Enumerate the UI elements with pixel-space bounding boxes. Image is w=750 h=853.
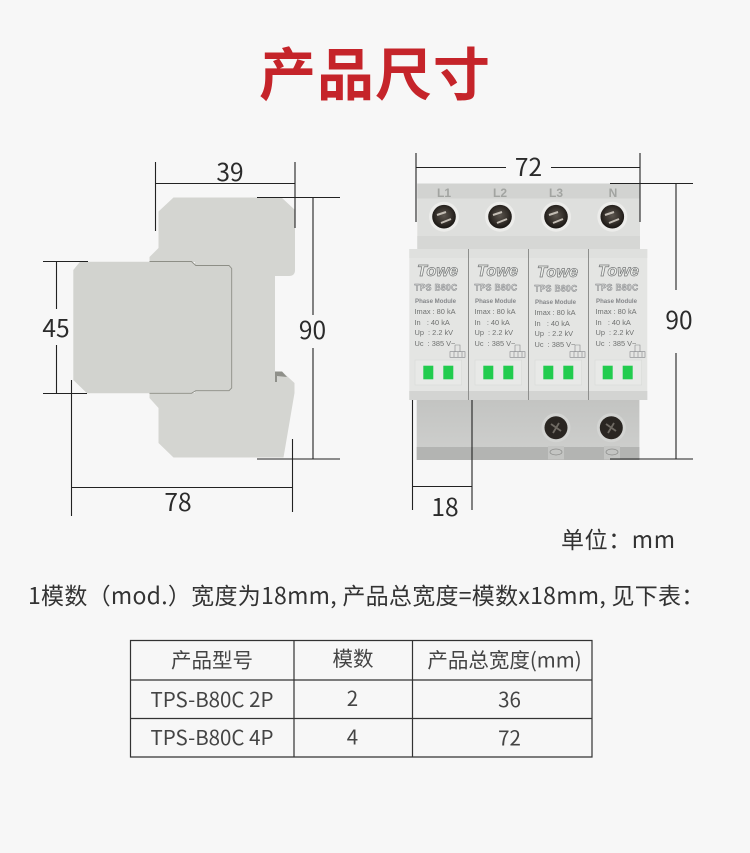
table row: 4P: TPS-B80C 4P [151, 721, 273, 751]
side view: rear body [150, 198, 295, 458]
module 3: Up : 2.2 kV [534, 329, 573, 338]
module 1: Up : 2.2 kV [414, 328, 453, 337]
side view: front cover [73, 262, 232, 393]
module 4: Up : 2.2 kV [596, 328, 634, 337]
module 3: In : 40 kA [534, 319, 570, 328]
module 2: Towe [477, 263, 518, 280]
dimension: 90 side: 90 [299, 312, 326, 347]
dimension: 78 [72, 380, 292, 519]
device: bottom base [417, 400, 639, 460]
size table [130, 640, 592, 757]
module 3: Towe [537, 264, 578, 281]
dimension: 90 front [610, 184, 693, 459]
device: top terminal block: L3 [549, 186, 563, 200]
table header: 产品型号 [171, 644, 253, 674]
table row: 2P: TPS-B80C 2P [151, 683, 273, 713]
module 3: Phase Module [535, 299, 576, 306]
table row: 2P: 2 [347, 682, 358, 712]
module 2 [474, 263, 525, 385]
module 2: In : 40 kA [474, 318, 510, 327]
table header: 模数 [332, 642, 374, 672]
dimension: 90 side [257, 198, 340, 459]
module 1: Towe [417, 263, 458, 280]
module 1: In : 40 kA [414, 318, 450, 327]
table header [171, 642, 582, 674]
module 3 [534, 264, 585, 385]
module 2: Imax : 80 kA [474, 307, 516, 316]
dimension: 18: 18 [431, 489, 459, 524]
dimension: 45 [42, 262, 88, 394]
module 4: TPS B80C [596, 282, 638, 294]
module 4: Uc : 385 V~ [596, 339, 636, 348]
module 3: Uc : 385 V~ [534, 340, 575, 349]
dimension: 18 [412, 400, 472, 524]
module 1: Phase Module [415, 298, 456, 305]
module 2: TPS B80C [474, 282, 518, 294]
module 2: Phase Module [475, 298, 516, 305]
module 1 [414, 263, 465, 385]
device: top terminal block: L2 [493, 186, 507, 200]
device: bottom screws [542, 413, 626, 442]
module 4 [595, 263, 645, 385]
module 3: TPS B80C [534, 284, 578, 294]
module 1: TPS B80C [414, 282, 458, 294]
title: 产品尺寸 [259, 30, 491, 112]
table row: 4P: 72 [498, 722, 521, 752]
module 4: Imax : 80 kA [596, 307, 637, 316]
device: top terminal block: L1 [437, 186, 451, 200]
side view drawing [42, 154, 340, 519]
front view drawing [409, 149, 693, 524]
device: top terminal block: N [609, 186, 617, 200]
module 2: Uc : 385 V~ [474, 339, 515, 348]
device: top terminal block [417, 184, 640, 249]
unit note: 单位：mm [561, 521, 676, 555]
device: top screws [429, 202, 627, 232]
dimension: 39 [156, 154, 295, 231]
table header: 产品总宽度(mm) [427, 644, 582, 674]
table row: 4P: 4 [347, 720, 358, 750]
dimension: 39: 39 [216, 154, 244, 189]
module 4: In : 40 kA [596, 318, 631, 327]
dimension: 72 [416, 149, 640, 222]
dimension: 72: 72 [515, 149, 542, 184]
module 1: Uc : 385 V~ [414, 339, 455, 348]
module 2: Up : 2.2 kV [474, 328, 513, 337]
device: module housing [409, 249, 647, 400]
module 4: Phase Module [596, 298, 637, 305]
table row: 4P [151, 720, 521, 752]
dimension: 78: 78 [164, 484, 192, 519]
table row: 2P [151, 682, 521, 713]
module 1: Imax : 80 kA [414, 307, 456, 316]
module 4: Towe [598, 263, 639, 280]
dimension: 90 front: 90 [665, 302, 693, 337]
dimension: 45: 45 [42, 310, 70, 345]
module 3: Imax : 80 kA [534, 308, 576, 317]
table row: 2P: 36 [498, 683, 521, 713]
module width description: 1模数（mod.）宽度为18mm, 产品总宽度=模数x18mm, 见下表： [28, 577, 705, 611]
